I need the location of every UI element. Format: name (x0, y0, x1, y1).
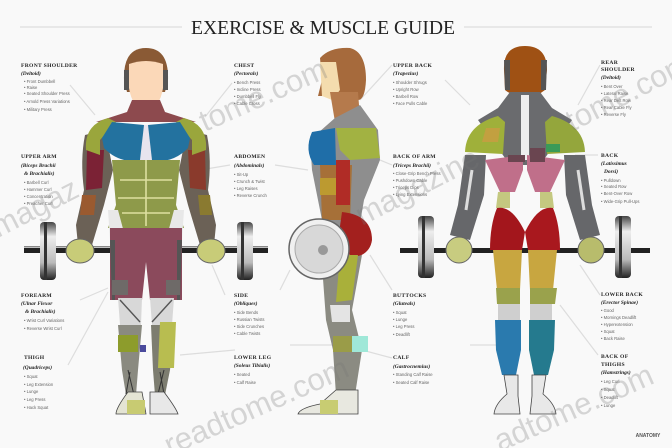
label: back: • Pulldown (601, 178, 621, 183)
label: upper arm (21, 154, 57, 206)
label: chest: (Pectorals) (234, 70, 258, 77)
label: chest: • Bench Press (234, 80, 260, 85)
label: rear shoulder: SHOULDER (601, 67, 635, 73)
label: buttocks: • Leg Press (393, 324, 414, 329)
label: upper back: • Shoulder Shrugs (393, 80, 427, 85)
label: side: (Obliques) (234, 300, 258, 307)
label: upper arm: • Hammer Curl (24, 187, 52, 192)
label: rear shoulder: • Bent Over (601, 84, 623, 89)
label: front shoulder: (Deltoid) (21, 70, 41, 77)
label: back of thighs: • Squat (601, 387, 615, 392)
foot (298, 390, 358, 414)
label: side: • Russian Twists (234, 317, 264, 322)
label: rear shoulder: REAR (601, 60, 619, 66)
label: upper back: • Barbell Row (393, 94, 419, 99)
label: calf: CALF (393, 355, 410, 361)
figure: back view (446, 46, 604, 414)
label: calf: (Gastrocnemius) (393, 363, 430, 370)
label: lower leg: (Soleus Tibialis) (234, 362, 270, 369)
label: front shoulder: • Military Press (24, 107, 52, 112)
label: abdomen: • Crunch & Twist (234, 179, 266, 184)
label: back of thighs: (Hamstrings) (601, 369, 631, 376)
abs (108, 160, 184, 228)
publisher mark: ANATOMY (636, 433, 661, 439)
label: back of arm: • Close-Grip Bench Press (393, 171, 441, 176)
label: upper arm: & Brachialis) (24, 170, 55, 177)
label: buttocks: (Gluteals) (393, 300, 415, 307)
hands (446, 237, 472, 263)
chest (102, 122, 145, 161)
label: forearm: (Ulnar Flexor (21, 300, 53, 307)
label: calf (393, 355, 433, 385)
label: back: • Seated Row (601, 184, 627, 189)
label: side: SIDE (234, 293, 248, 299)
label: rear shoulder: • Lateral Raise (601, 91, 629, 96)
traps (478, 92, 572, 165)
label: side: • Cable Twists (234, 331, 260, 336)
watermarks: tome.com (194, 51, 332, 138)
neck and traps (96, 100, 196, 122)
label: rear shoulder: (Deltoid) (601, 74, 621, 81)
label: thigh (23, 355, 54, 410)
torso (310, 105, 380, 235)
label: rear shoulder: • Reverse Fly (601, 112, 627, 117)
pelvis and thighs (110, 228, 182, 300)
label: thigh: • Squat (24, 374, 38, 379)
label: front shoulder: • Raise (24, 85, 38, 90)
label: back: • Wide-Grip Pull-Ups (601, 199, 639, 204)
title: EXERCISE & MUSCLE GUIDE (191, 18, 455, 39)
calves (118, 325, 142, 395)
label: back of arm: • Lying Extensions (393, 192, 427, 197)
label: back: (Latissimus (601, 160, 627, 167)
label: front shoulder: • Front Dumbbell (24, 79, 55, 84)
glutes (338, 212, 372, 258)
label: abdomen: • Reverse Crunch (234, 193, 268, 198)
label: back of arm: • Triceps Dips (393, 185, 419, 190)
weight plate (289, 219, 349, 279)
barbell: front figure (24, 222, 268, 280)
label: rear shoulder: • Rear Cable Fly (601, 105, 632, 110)
label: upper arm: • Concentration (24, 194, 53, 199)
label: upper back (393, 63, 433, 106)
knees (118, 298, 174, 325)
head (124, 48, 168, 110)
hamstrings (493, 250, 522, 290)
label: back of arm: (Triceps Brachii) (393, 162, 431, 169)
label: abdomen (234, 154, 268, 198)
label: back of thighs: BACK OF (601, 354, 629, 360)
hands (66, 239, 94, 263)
arms (450, 155, 486, 240)
label: front shoulder (21, 63, 78, 112)
label: thigh: • Leg Extension (24, 382, 54, 387)
label: thigh: (Quadriceps) (23, 364, 52, 371)
label: back of thighs (601, 354, 631, 408)
label: back (601, 153, 639, 204)
label: lower leg (234, 355, 272, 385)
label: lower leg: • Seated (234, 372, 251, 377)
label: front shoulder: FRONT SHOULDER (21, 63, 78, 69)
label: upper arm: • Preacher Curl (24, 201, 53, 206)
knee band (496, 288, 557, 304)
label: lower back: • Squat (601, 329, 615, 334)
watermarks: magazine (349, 140, 485, 232)
legs (322, 255, 362, 395)
label: abdomen: • Sit-Up (234, 172, 249, 177)
label: back of thighs: THIGHS (601, 362, 625, 368)
label: lower back: • Hyperextension (601, 322, 633, 327)
label: upper back: • Face Pulls Cable (393, 101, 428, 106)
label: side: • Side Bends (234, 310, 258, 315)
label: back of thighs: • Leg Curl (601, 379, 620, 384)
label: lower back: • Good (601, 308, 615, 313)
label: chest: • Cable Cross (234, 101, 260, 106)
label: thigh: • Lunge (24, 389, 39, 394)
label: back of thighs: • Deadlift (601, 395, 619, 400)
label: calf: • Standing Calf Raise (393, 372, 433, 377)
label: chest: • Incline Press (234, 87, 261, 92)
label: side: • Side Crunches (234, 324, 264, 329)
label: calf: • Seated Calf Raise (393, 380, 430, 385)
label: rear shoulder: • Rear Delt Row (601, 98, 632, 103)
label: back of arm (393, 154, 441, 197)
figure: side view (289, 48, 380, 414)
lats (485, 155, 523, 192)
label: back of thighs: • Lunge (601, 403, 616, 408)
label: forearm (21, 293, 64, 331)
label: lower leg: • Calf Raise (234, 380, 257, 385)
label: upper back: (Trapezius) (393, 70, 418, 77)
label: buttocks (393, 293, 426, 337)
label: back: • Bent-Over Row (601, 191, 633, 196)
label: upper back: • Upright Row (393, 87, 420, 92)
label: forearm: • Reverse Wrist Curl (24, 326, 62, 331)
label: back of arm: BACK OF ARM (393, 154, 436, 160)
upper arm and forearm (76, 130, 113, 245)
label: lower back: • Back Raise (601, 336, 625, 341)
head (504, 46, 547, 96)
label: upper arm: UPPER ARM (21, 154, 57, 160)
label: chest: CHEST (234, 63, 254, 69)
label: lower back: (Erector Spinae) (601, 299, 638, 306)
label: back: BACK (601, 153, 619, 159)
label: rear shoulder (601, 60, 635, 117)
label: back of arm: • Pushdown Cable (393, 178, 428, 183)
label: lower back: LOWER BACK (601, 292, 643, 298)
label: thigh: • Leg Press (24, 397, 45, 402)
label: abdomen: • Leg Raises (234, 186, 258, 191)
figure: front view (66, 48, 225, 414)
label: upper arm: • Barbell Curl (24, 180, 49, 185)
ankles and feet (494, 375, 520, 414)
waist (496, 192, 554, 208)
barbell: back figure (400, 216, 650, 278)
hair and face (318, 48, 366, 105)
label: buttocks: • Deadlift (393, 332, 411, 337)
label: forearm: & Brachialis) (25, 308, 56, 315)
label: front shoulder: • Seated Shoulder Press (24, 91, 70, 96)
label: front shoulder: • Arnold Press Variations (24, 99, 70, 104)
label: chest: • Dumbbell Fly (234, 94, 262, 99)
label: upper arm: (Biceps Brachii (21, 162, 56, 169)
label: buttocks: • Squat (393, 310, 407, 315)
label: lower back: • Mornings Deadlift (601, 315, 637, 320)
label: side (234, 293, 264, 336)
label: forearm: FOREARM (21, 293, 52, 299)
label: abdomen: (Abdominals) (234, 162, 264, 169)
calves (495, 320, 521, 375)
feet (116, 392, 146, 414)
label: thigh: • Hack Squat (24, 405, 49, 410)
label: forearm: • Wrist Curl Variations (24, 318, 64, 323)
label: lower leg: LOWER LEG (234, 355, 272, 361)
label: back: Dorsi) (603, 168, 618, 175)
glutes (490, 208, 525, 250)
label: buttocks: BUTTOCKS (393, 293, 426, 299)
label: abdomen: ABDOMEN (234, 154, 265, 160)
deltoids (86, 118, 116, 155)
rear deltoids (465, 116, 505, 154)
label: buttocks: • Lunge (393, 317, 408, 322)
label: chest (234, 63, 262, 106)
label: lower back (601, 292, 643, 341)
label: upper back: UPPER BACK (393, 63, 433, 69)
label: thigh: THIGH (24, 355, 45, 361)
